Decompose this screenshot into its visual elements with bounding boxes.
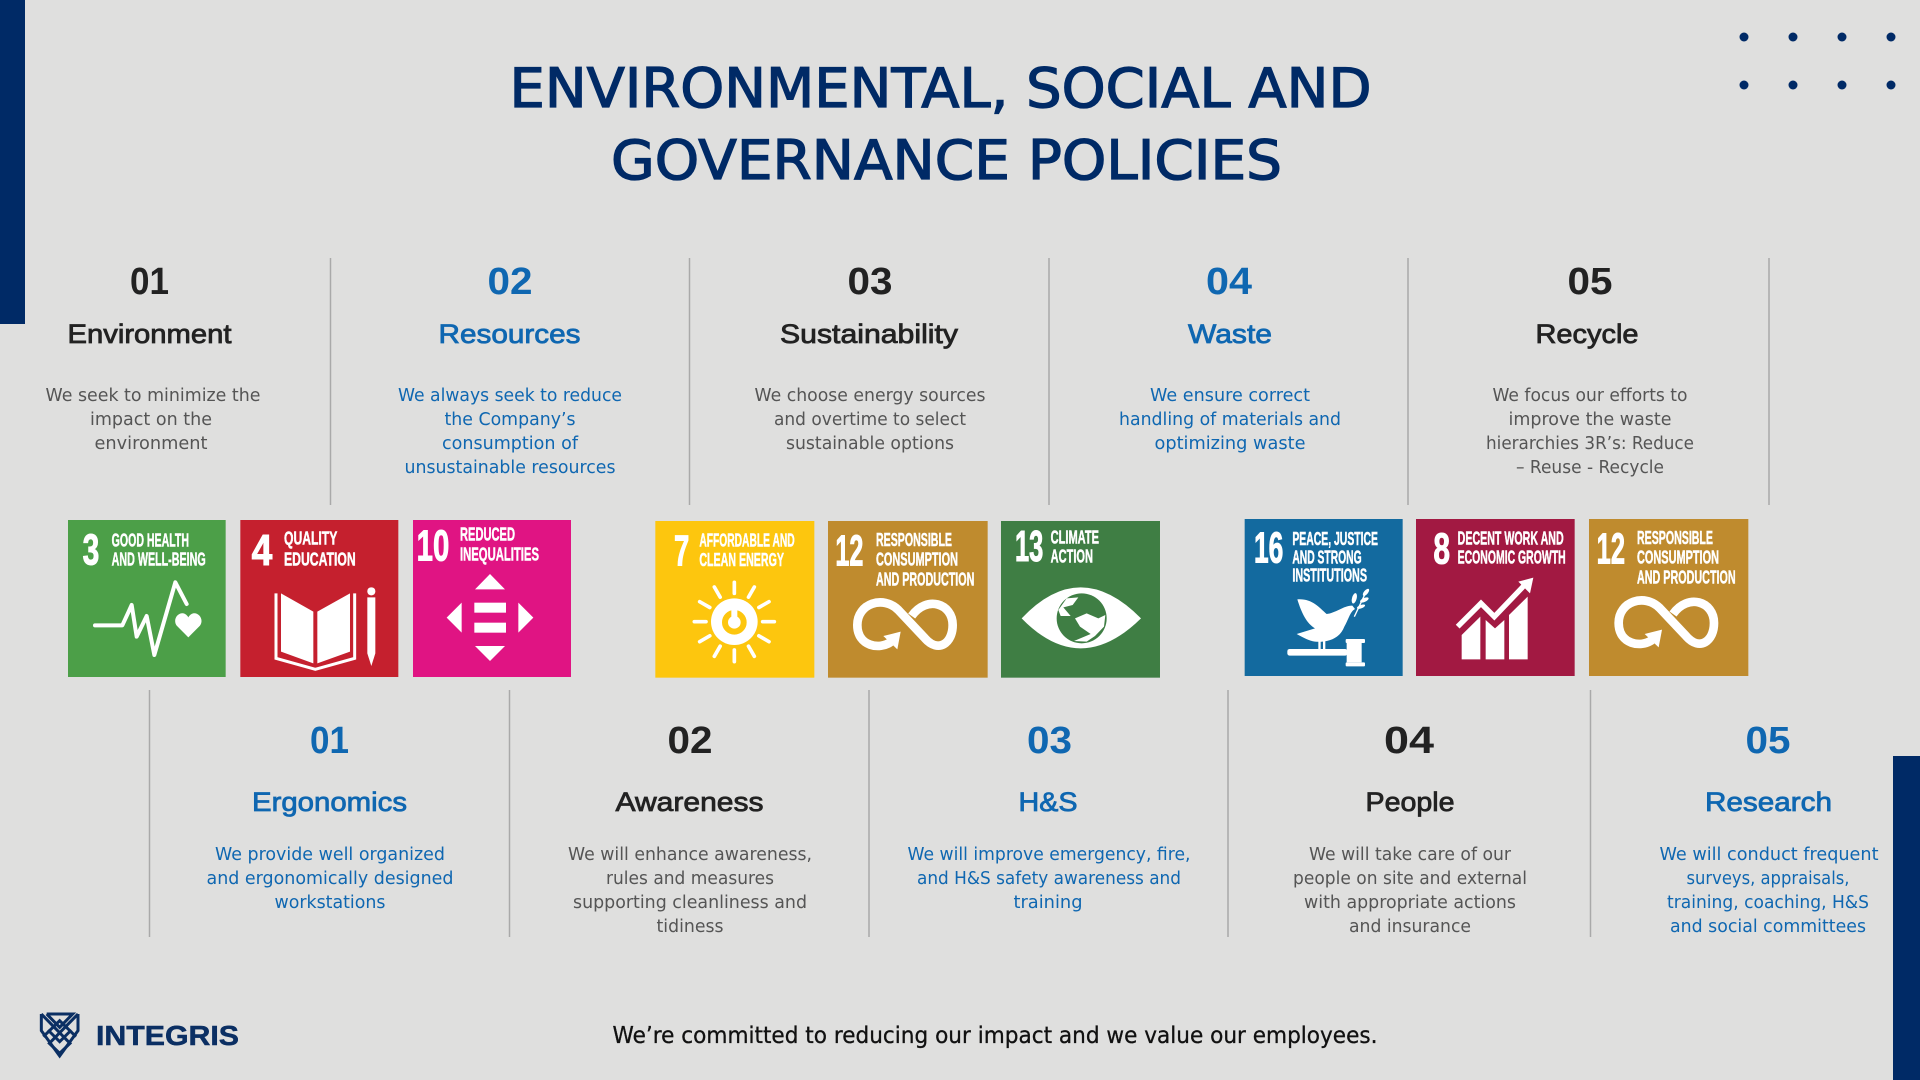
body text: surveys, appraisals,	[1686, 869, 1850, 889]
heading: waste: Waste	[1188, 319, 1272, 349]
body text: tidiness	[656, 917, 724, 937]
body text	[398, 386, 622, 478]
SDG tile 12: responsible consumption: 12	[835, 528, 863, 576]
panel: waste	[1119, 261, 1341, 454]
body text: We seek to minimize the	[46, 386, 260, 406]
SDG tile 4: quality education: 4	[252, 527, 272, 575]
body text	[1119, 386, 1341, 454]
body text: rules and measures	[606, 869, 774, 889]
panel: research	[1660, 720, 1879, 937]
SDG tile 8: decent work: 8	[1433, 525, 1450, 573]
panel: ergonomics	[206, 720, 454, 913]
SDG tile 12: responsible consumption (second): AND PRODUCTION	[1637, 566, 1736, 587]
SDG tile 7: affordable and clean energy: AFFORDABLE AND	[699, 530, 795, 551]
body text: training, coaching, H&S	[1667, 893, 1869, 913]
body text: handling of materials and	[1119, 410, 1341, 430]
body text: and overtime to select	[774, 410, 966, 430]
panel: resources	[398, 261, 622, 478]
SDG tile 4: quality education: EDUCATION	[284, 549, 356, 570]
body text: We will take care of our	[1309, 845, 1512, 865]
SDG tile 4: quality education: QUALITY	[284, 527, 338, 548]
heading: awareness: Awareness	[616, 787, 764, 817]
footer tagline: We’re committed to reducing our impact and we value our employees.	[612, 1023, 1378, 1049]
title: ENVIRONMENTAL, SOCIAL AND	[510, 57, 1372, 120]
body text: the Company’s	[444, 410, 576, 430]
body text: and ergonomically designed	[206, 869, 454, 889]
panel: recycle	[1486, 261, 1694, 478]
body text: environment	[94, 434, 208, 454]
SDG tile 8: decent work: ECONOMIC GROWTH	[1458, 546, 1566, 567]
body text: We provide well organized	[215, 845, 445, 865]
number 04: 04	[1384, 720, 1434, 762]
SDG tile 7: affordable and clean energy: 7	[674, 528, 689, 576]
body text: optimizing waste	[1154, 434, 1306, 454]
left accent bar	[0, 0, 25, 324]
SDG tile 16: peace and justice: PEACE, JUSTICE	[1292, 528, 1378, 549]
panel: environment	[46, 261, 260, 454]
title	[510, 57, 1372, 192]
wordmark: INTEGRIS	[96, 1020, 239, 1051]
SDG tile 10: reduced inequalities: 10	[417, 523, 449, 571]
number 03: 03	[848, 261, 892, 303]
heading: resources: Resources	[438, 319, 580, 349]
heading: sustainability: Sustainability	[780, 319, 959, 349]
SDG tile 12: responsible consumption (second): 12	[1597, 525, 1625, 573]
heading: H&S: H&S	[1018, 787, 1078, 817]
panel: awareness	[568, 720, 812, 937]
SDG tile 12: responsible consumption: CONSUMPTION	[876, 549, 958, 570]
body text: supporting cleanliness and	[573, 893, 807, 913]
SDG tile 3: good health: AND WELL-BEING	[112, 548, 206, 569]
SDG tile 3: good health	[68, 520, 226, 677]
body text: We always seek to reduce	[398, 386, 622, 406]
SDG tile 3: good health: 3	[83, 526, 99, 574]
number 01: 01	[130, 261, 169, 303]
body text: impact on the	[90, 410, 212, 430]
heading: research: Research	[1705, 787, 1832, 817]
number 05: 05	[1746, 720, 1790, 762]
number 02: 02	[668, 720, 712, 762]
SDG tile 7: affordable and clean energy	[655, 521, 814, 678]
SDG tile 13: climate action: 13	[1015, 523, 1043, 571]
SDG tile 12: responsible consumption: AND PRODUCTION	[876, 568, 974, 589]
body text	[1486, 386, 1694, 478]
body text: improve the waste	[1508, 410, 1672, 430]
body text	[1293, 845, 1527, 937]
SDG tile 4: quality education	[240, 520, 398, 677]
body text: workstations	[274, 893, 386, 913]
SDG tile 13: climate action	[1001, 521, 1160, 678]
body text: training	[1014, 893, 1082, 913]
SDG tile 16: peace and justice: 16	[1254, 525, 1283, 573]
SDG tile 12: responsible consumption (second)	[1589, 519, 1748, 676]
SDG tile 8: decent work: DECENT WORK AND	[1458, 527, 1564, 548]
body text	[908, 845, 1190, 913]
SDG tile 7: affordable and clean energy: CLEAN ENERGY	[699, 549, 784, 570]
number 05: 05	[1568, 261, 1612, 303]
body text	[1660, 845, 1879, 937]
body text: We focus our efforts to	[1492, 386, 1688, 406]
logo: Integris	[41, 1014, 239, 1056]
SDG tile 12: responsible consumption	[828, 521, 988, 678]
number 03: 03	[1027, 720, 1072, 762]
SDG tile 13: climate action: CLIMATE	[1051, 526, 1099, 547]
title: GOVERNANCE POLICIES	[611, 129, 1282, 192]
number 01: 01	[310, 720, 349, 762]
body text	[46, 386, 260, 454]
body text: consumption of	[442, 434, 579, 454]
SDG tile 16: peace and justice: INSTITUTIONS	[1292, 565, 1367, 586]
body text: hierarchies 3R’s: Reduce	[1486, 434, 1694, 454]
body text: unsustainable resources	[404, 458, 616, 478]
panel: people	[1293, 720, 1527, 937]
body text: and social committees	[1670, 917, 1866, 937]
dot grid decoration	[1740, 32, 1896, 90]
SDG tile 13: climate action: ACTION	[1051, 546, 1093, 567]
body text: sustainable options	[786, 434, 954, 454]
SDG tile 12: responsible consumption (second): CONSUMPTION	[1637, 546, 1719, 567]
SDG tile 3: good health: GOOD HEALTH	[112, 529, 189, 550]
heading: recycle: Recycle	[1536, 319, 1638, 349]
SDG tile 16: peace and justice	[1245, 519, 1403, 676]
body text: – Reuse - Recycle	[1516, 458, 1664, 478]
body text: We will enhance awareness,	[568, 845, 812, 865]
heading: ergonomics: Ergonomics	[252, 787, 407, 817]
SDG tile 8: decent work	[1416, 519, 1575, 676]
body text: We choose energy sources	[754, 386, 986, 406]
body text: people on site and external	[1293, 869, 1527, 889]
body text	[206, 845, 454, 913]
number 04: 04	[1206, 261, 1252, 303]
body text: and insurance	[1349, 917, 1471, 937]
SDG tile 16: peace and justice: AND STRONG	[1292, 546, 1362, 567]
SDG tile 12: responsible consumption (second): RESPONSIBLE	[1637, 527, 1713, 548]
SDG tile 10: reduced inequalities: INEQUALITIES	[460, 544, 539, 565]
body text	[754, 386, 986, 454]
panel: sustainability	[754, 261, 986, 454]
body text: We will conduct frequent	[1660, 845, 1879, 865]
SDG tile 10: reduced inequalities	[413, 520, 571, 677]
body text: with appropriate actions	[1304, 893, 1516, 913]
icon: knot shield	[41, 1014, 78, 1056]
number 02: 02	[488, 261, 532, 303]
body text: and H&S safety awareness and	[917, 869, 1181, 889]
heading: environment: Environment	[68, 319, 232, 349]
body text	[568, 845, 812, 937]
SDG tile 10: reduced inequalities: REDUCED	[460, 524, 515, 545]
right accent bar	[1893, 756, 1920, 1080]
SDG tile 12: responsible consumption: RESPONSIBLE	[876, 529, 952, 550]
panel: H&S	[908, 720, 1190, 913]
body text: We ensure correct	[1150, 386, 1310, 406]
heading: people: People	[1366, 787, 1454, 817]
body text: We will improve emergency, fire,	[908, 845, 1190, 865]
